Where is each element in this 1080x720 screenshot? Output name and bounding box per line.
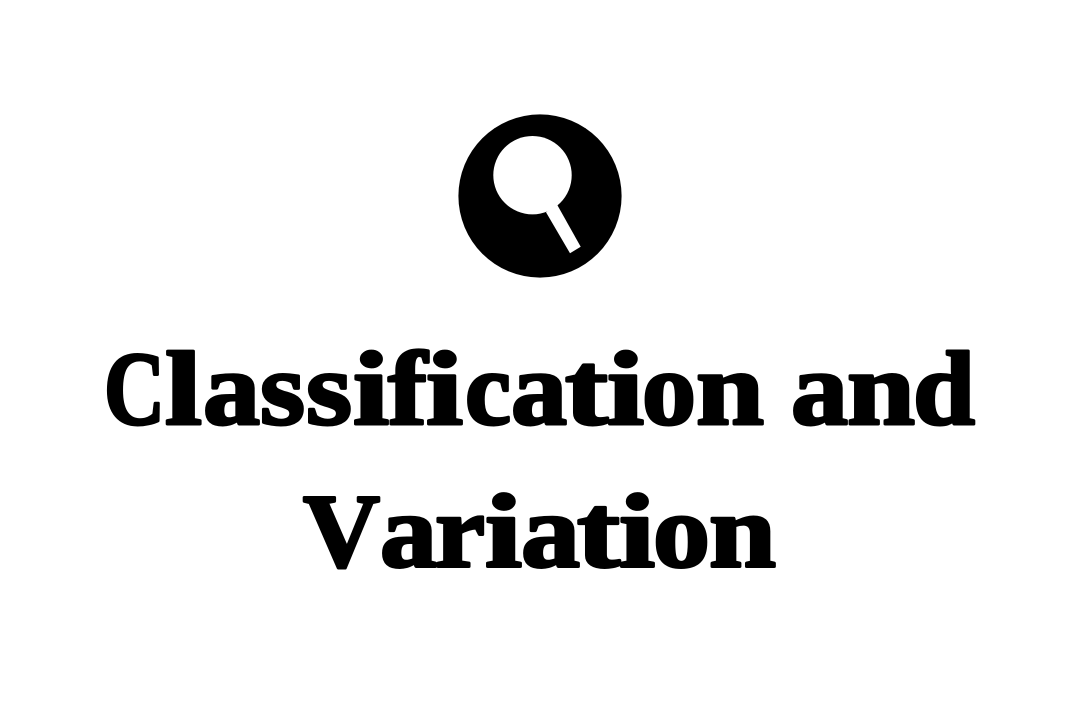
title: C [104, 330, 165, 447]
title: a [511, 330, 567, 447]
title: i [607, 330, 644, 447]
title [104, 330, 976, 590]
title: d [913, 330, 975, 447]
title: c [465, 330, 511, 447]
icon: magnifying glass in black circle [458, 114, 622, 278]
title: n [847, 330, 915, 447]
title: f [388, 330, 428, 447]
title: i [485, 472, 522, 590]
title: a [203, 330, 260, 447]
title: r [435, 472, 485, 590]
title: a [521, 472, 580, 590]
title: a [380, 472, 437, 590]
title: i [353, 330, 389, 447]
title: s [306, 330, 352, 447]
title: n [696, 330, 764, 447]
title: a [791, 330, 848, 447]
title: t [577, 472, 620, 590]
title: l [165, 330, 202, 447]
title: o [642, 330, 696, 447]
title: V [303, 472, 380, 590]
title: n [709, 472, 776, 590]
title: t [565, 330, 608, 447]
title: s [260, 330, 305, 447]
title: o [653, 472, 710, 590]
title: i [619, 472, 655, 590]
title: i [426, 330, 463, 447]
